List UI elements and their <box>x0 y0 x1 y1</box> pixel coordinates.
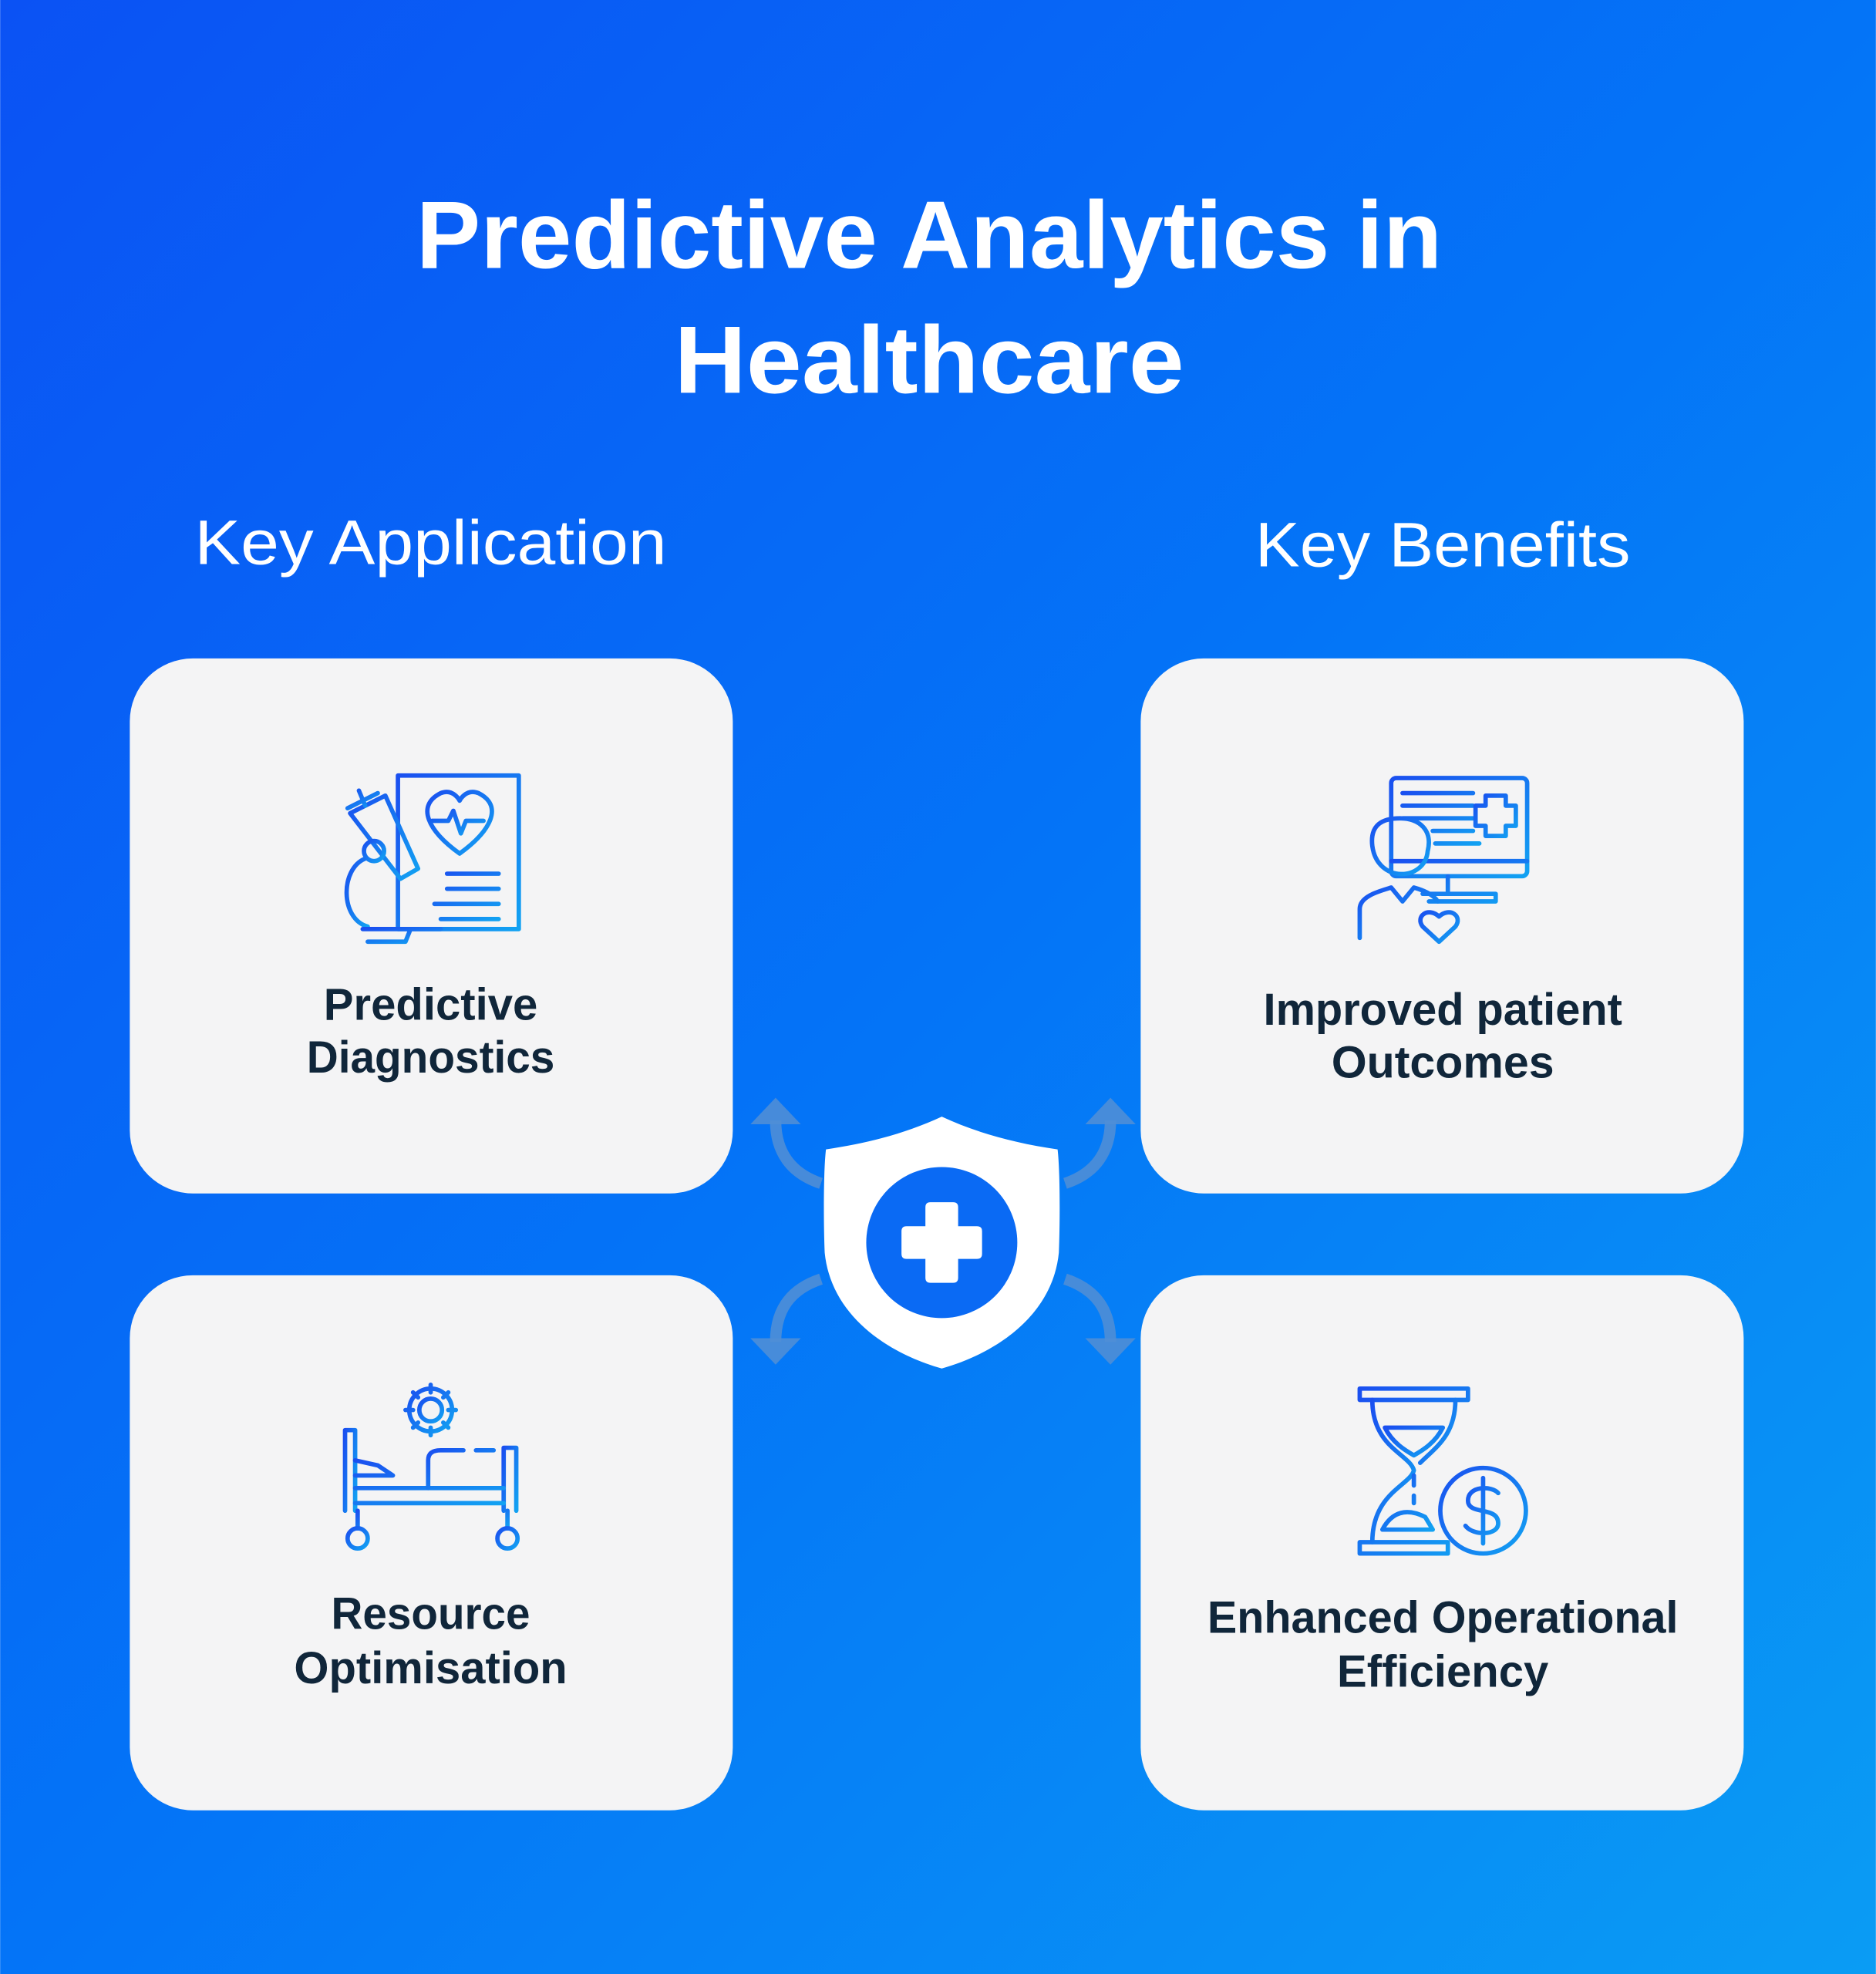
title <box>416 183 1442 413</box>
label <box>1207 1593 1678 1697</box>
label: Enhanced Operational <box>1207 1593 1678 1643</box>
label <box>1264 985 1622 1088</box>
heading: Key Benefits: Key Benefits <box>1255 510 1630 581</box>
panel: Predictive Diagnostics <box>130 659 733 1194</box>
icon: hospital bed with gear <box>345 1385 517 1548</box>
icon: microscope and heart report <box>347 776 519 942</box>
label: Outcomes <box>1332 1038 1554 1088</box>
label: Optimisation <box>294 1643 568 1693</box>
label: Improved patient <box>1264 985 1622 1035</box>
label <box>307 979 554 1083</box>
icon: patient and monitor <box>1359 778 1527 942</box>
label: Diagnostics <box>307 1032 554 1083</box>
heading: Key Application: Key Application <box>194 507 667 578</box>
label <box>294 1589 568 1693</box>
label: Predictive <box>324 979 537 1029</box>
panel: Resource Optimisation <box>130 1275 733 1811</box>
title: Healthcare <box>674 307 1184 413</box>
icon: hourglass and dollar coin <box>1359 1389 1526 1554</box>
label: Resource <box>332 1589 530 1639</box>
title: Predictive Analytics in <box>416 183 1442 289</box>
panel: Enhanced Operational Efficiency <box>1140 1275 1744 1811</box>
panel: Improved patient Outcomes <box>1140 659 1744 1194</box>
label: Efficiency <box>1337 1647 1549 1697</box>
shield with medical cross <box>823 1117 1059 1369</box>
arrows <box>776 1120 1110 1342</box>
